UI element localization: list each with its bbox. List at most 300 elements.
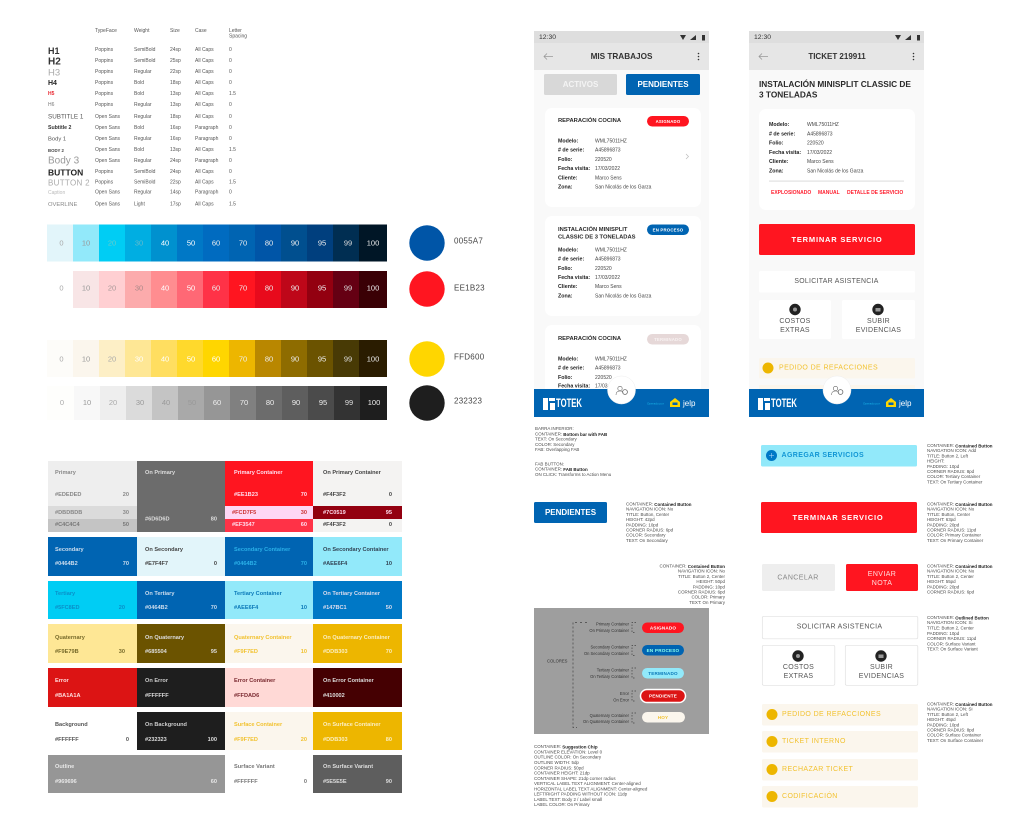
panel: tonal palette blue: 95 (318, 238, 326, 248)
panel: phone screen ticket (749, 31, 924, 417)
type specifications: 13sp (170, 147, 181, 153)
panel: tonal palette blue: 90 (291, 238, 299, 248)
text block: cancelar and enviar spec: TITLE: Button 2, Center (927, 574, 974, 579)
row: secondary: 70 (123, 561, 129, 567)
row: background and surface: 0 (126, 737, 129, 743)
type specifications: All Caps (195, 202, 214, 208)
row: error: On Error (145, 678, 169, 684)
type specifications: Poppins (95, 69, 114, 75)
type specifications: 17sp (170, 202, 181, 208)
component: ticket interno button: TICKET INTERNO (782, 738, 846, 745)
card: instalacion en proceso: San Nicolás de los Garza (595, 294, 652, 300)
text block: suggestion chip spec: CONTAINER ELEVATION: Level 0 (534, 750, 603, 754)
text block: bottom bar and fab notes: CONTAINER: Bottom bar with FAB (535, 431, 607, 436)
component: ticket interno button (762, 731, 918, 752)
panel: tonal palette grey (47, 386, 387, 420)
text block: agregar servicios spec: NAVIGATION ICON: Add (927, 448, 977, 453)
ticket details card: 220520 (807, 140, 824, 146)
panel: tonal palette red: 10 (82, 284, 90, 292)
text block: surface container button spec: NAVIGATION ICON: Si (927, 707, 972, 712)
row: quaternary: Quaternary Container (234, 635, 292, 641)
text block: cancelar and enviar spec: CONTAINER: Contained Button (927, 564, 993, 568)
type specifications: 0 (229, 80, 232, 86)
row: background and surface: On Background (145, 722, 188, 728)
button: costos extras (759, 300, 831, 339)
row: background and surface: Background (55, 722, 88, 728)
table header: Weight (134, 28, 150, 34)
panel: suggestion chips diagram: On Error (613, 698, 630, 702)
component: subir evidencias outlined button: EVIDENCIAS (859, 673, 904, 680)
panel: tonal palette red: 40 (161, 284, 169, 292)
text block: cancelar and enviar spec (927, 564, 993, 594)
ticket title: INSTALACIÓN MINISPLIT CLASSIC DE (759, 78, 911, 89)
panel: tonal palette grey: 30 (136, 398, 144, 407)
panel: tonal palette red: 80 (265, 284, 273, 292)
text block: cancelar and enviar spec: NAVIGATION ICON: No (927, 569, 975, 574)
row: error: #BA1A1A (55, 693, 80, 699)
type specifications: Paragraph (195, 190, 219, 196)
row: quaternary: 70 (386, 649, 392, 655)
row: error: #410002 (323, 693, 345, 699)
button: pedido de refacciones (759, 358, 915, 378)
type specifications: All Caps (195, 114, 214, 120)
text block: surface container button spec: PADDING: 10pd (927, 722, 960, 727)
card: reparacion cocina terminado: WML75011HZ (595, 356, 627, 362)
component: cancelar button: CANCELAR (777, 574, 819, 582)
type specifications: All Caps (195, 91, 214, 97)
type specifications: SemiBold (134, 58, 156, 64)
type specifications: Regular (134, 158, 152, 164)
type specifications: 0 (229, 190, 232, 196)
row: primary: #FCD7F5 (232, 510, 256, 516)
row: tertiary: #5FC8ED (55, 605, 80, 611)
row: primary: Primary Container (234, 470, 283, 476)
card: reparacion cocina terminado: # de serie: (558, 366, 584, 372)
panel: tonal palette grey: 95 (319, 398, 327, 407)
row: tertiary: 70 (211, 605, 217, 611)
component: terminar servicio button: TERMINAR SERVICIO (793, 513, 883, 522)
type specifications: Regular (134, 69, 152, 75)
bottom bar (749, 389, 924, 417)
component: codificacion button (762, 786, 918, 808)
type specifications: Poppins (95, 180, 114, 186)
text block: pendientes button spec: CONTAINER: Contained Button (626, 502, 692, 506)
card: instalacion en proceso: Fecha visita: (558, 275, 590, 281)
text block: agregar servicios spec: TITLE: Button 2, Left (927, 453, 969, 458)
panel: suggestion chips diagram: Quaternary Container (590, 713, 630, 718)
text block: surface container button spec: TEXT: On Surface Container (927, 738, 984, 743)
row: primary: #EE1B23 (234, 492, 258, 498)
text block: suggestion chip spec: VERTICAL LABEL TEXT ALIGNMENT: Center-aligned (534, 781, 641, 786)
text block: terminar servicio spec: HEIGHT: 63pd (927, 517, 956, 522)
panel: typography table (48, 28, 247, 208)
ticket details card: EXPLOSIONADO (771, 190, 811, 196)
brand colour swatches (409, 225, 485, 421)
text block: primary contained button spec: CORNER RADIUS: 6pd (678, 590, 726, 594)
row: outline and surface variant: 90 (386, 779, 392, 785)
button: subir evidencias (842, 300, 915, 339)
row: quaternary: 30 (119, 649, 125, 655)
text block: suggestion chip spec: LEFT/RIGHT PADDING WITHOUT ICON: 11dp (534, 792, 628, 796)
type specifications: 1.5 (229, 147, 236, 153)
component: terminar servicio button (761, 502, 917, 533)
panel: tonal palette yellow: 10 (82, 354, 90, 364)
type specifications: Open Sans (95, 147, 121, 153)
ticket title: 3 TONELADAS (759, 90, 818, 100)
type style names: Body 1 (48, 136, 66, 142)
ticket details card: San Nicolás de los Garza (807, 168, 864, 174)
card: reparacion cocina asignado: # de serie: (558, 148, 584, 154)
table header: Spacing (229, 34, 247, 40)
type specifications: 0 (229, 69, 232, 75)
panel: tonal palette yellow: 70 (239, 354, 247, 364)
row: secondary: Secondary (55, 547, 84, 553)
component: agregar servicios button: AGREGAR SERVICIOS (782, 452, 864, 459)
panel: suggestion chips diagram: Tertiary Container (597, 668, 630, 672)
text block: surface container button spec: COLOR: Surface Container (927, 733, 982, 738)
chip: terminado: TERMINADO (648, 671, 678, 676)
brand colour swatches: 0055A7 (454, 236, 483, 246)
panel: tonal palette yellow: 20 (108, 354, 116, 364)
text block: terminar servicio spec: COLOR: Primary Container (927, 533, 982, 538)
text block: terminar servicio spec: CONTAINER: Contained Button (927, 502, 993, 506)
panel: tonal palette yellow: 99 (344, 354, 352, 364)
type specifications: 1.5 (229, 202, 236, 208)
panel: tonal palette grey: 40 (162, 398, 170, 407)
type specifications: All Caps (195, 47, 214, 53)
text block: suggestion chip spec: LABEL TEXT: Body 2 / Label small (534, 797, 602, 802)
row: quaternary (48, 624, 402, 663)
row: secondary: #0464B2 (234, 561, 257, 567)
text block: primary contained button spec: CONTAINER: Contained Button (660, 564, 725, 568)
panel: tonal palette grey: 70 (240, 398, 248, 407)
text block: outlined button spec: COLOR: Surface Variant (927, 641, 976, 646)
type specifications: 16sp (170, 136, 181, 142)
panel: tonal palette red: 100 (367, 284, 379, 292)
text block: agregar servicios spec: COLOR: Tertiary Container (927, 474, 981, 479)
type specifications: Paragraph (195, 136, 219, 142)
text block: suggestion chip spec: CONTAINER HEIGHT: 21dp (534, 770, 590, 776)
panel: tonal palette blue: 30 (135, 238, 143, 248)
type specifications: Poppins (95, 58, 114, 64)
row: quaternary: 10 (301, 649, 307, 655)
ticket details card: Zona: (769, 168, 784, 174)
component: pedido de refacciones button (762, 704, 918, 726)
type specifications: 0 (229, 114, 232, 120)
row: primary: #C4C4C4 (55, 522, 80, 528)
type specifications: 16sp (170, 125, 181, 131)
row: primary: 50 (123, 522, 129, 528)
row: quaternary: On Quaternary Container (323, 635, 391, 641)
row: primary: 95 (386, 510, 392, 516)
text block: outlined button spec: PADDING: 10pd (927, 631, 960, 636)
row: tertiary: #0464B2 (145, 605, 168, 611)
panel: tonal palette grey: 10 (83, 398, 91, 407)
panel: tonal palette red: 50 (187, 284, 195, 292)
text block: primary contained button spec: NAVIGATION ICON: No (678, 569, 726, 574)
component: rechazar ticket button (762, 759, 918, 780)
tab: pendientes: PENDIENTES (637, 80, 689, 89)
chip: en proceso (642, 645, 684, 656)
app bar (534, 43, 709, 70)
panel: tonal palette yellow: 40 (161, 354, 169, 364)
ticket details card: Fecha visita: (769, 150, 801, 156)
row: error (48, 668, 402, 707)
row: primary: #F4F3F2 (323, 492, 346, 498)
text block: agregar servicios spec: CONTAINER: Contained Button (927, 443, 993, 448)
row: background and surface: #232323 (145, 737, 167, 743)
type specifications: 0 (229, 58, 232, 64)
row: error: #FFDAD6 (234, 693, 259, 699)
text block: suggestion chip spec: LABEL COLOR: On Primary (534, 802, 590, 807)
type style names: BUTTON 2 (48, 178, 90, 188)
type specifications: 13sp (170, 91, 181, 97)
table header: Case (195, 28, 207, 34)
type specifications: All Caps (195, 58, 214, 64)
row: primary: 60 (301, 522, 307, 528)
button: solicitar asistencia (759, 271, 915, 292)
text block: suggestion chip spec: CONTAINER: Suggestion Chip (534, 744, 598, 749)
ticket details card: Folio: (769, 140, 784, 146)
ticket details card (759, 109, 915, 210)
card: reparacion cocina asignado: Marco Sens (595, 175, 622, 181)
type specifications: 24sp (170, 158, 181, 164)
card: reparacion cocina asignado: Folio: (558, 157, 573, 163)
type specifications: SemiBold (134, 180, 156, 186)
row: quaternary: Quaternary (55, 635, 86, 641)
panel: tonal palette red: 90 (291, 284, 299, 292)
component: agregar servicios button (761, 445, 917, 466)
status bar (534, 31, 709, 43)
text block: agregar servicios spec: HEIGHT: (927, 459, 945, 464)
row: background and surface: 80 (386, 737, 392, 743)
chip: asignado: ASIGNADO (650, 625, 676, 630)
table header: TypeFace (95, 28, 117, 34)
text block: terminar servicio spec: NAVIGATION ICON: No (927, 507, 975, 512)
panel: colour roles grid (48, 461, 402, 793)
component: pedido de refacciones button: PEDIDO DE REFACCIONES (782, 711, 881, 718)
type specifications (95, 47, 236, 208)
type specifications: 0 (229, 136, 232, 142)
type specifications: Open Sans (95, 136, 121, 142)
panel: tonal palette blue: 100 (367, 238, 379, 248)
app bar: MIS TRABAJOS (591, 52, 653, 61)
type style names: BODY 2 (48, 148, 65, 153)
ticket details card: MANUAL (818, 190, 840, 196)
card: reparacion cocina asignado: San Nicolás de los Garza (595, 185, 652, 191)
text block: bottom bar and fab notes: FAB: Overlapping FAB (535, 447, 579, 452)
panel: tonal palette blue: 99 (344, 238, 352, 248)
chip: hoy (642, 712, 685, 722)
component: cancelar button (762, 564, 835, 591)
row: tertiary: 10 (301, 605, 307, 611)
panel: tonal palette yellow: 80 (265, 354, 273, 364)
type specifications: Regular (134, 136, 152, 142)
row: outline and surface variant (48, 755, 402, 793)
row: tertiary: Tertiary Container (234, 591, 283, 597)
card: instalacion en proceso: WML75011HZ (595, 247, 627, 253)
type specifications: SemiBold (134, 169, 156, 175)
row: primary: Primary (55, 470, 77, 476)
app bar (749, 43, 924, 70)
type specifications: 0 (229, 169, 232, 175)
type specifications: Regular (134, 190, 152, 196)
row: primary: #EDEDED (55, 492, 81, 498)
card: reparacion cocina asignado (545, 108, 701, 207)
ticket details card: # de serie: (769, 131, 795, 137)
row: secondary: On Secondary Container (323, 547, 389, 553)
row: primary: 70 (301, 492, 307, 498)
card: reparacion cocina asignado: Modelo: (558, 138, 579, 144)
text block: pendientes button spec (626, 502, 692, 543)
type style names: BUTTON (48, 168, 83, 178)
type specifications: Poppins (95, 91, 114, 97)
row: outline and surface variant: 60 (211, 779, 217, 785)
card: reparacion cocina asignado: 17/03/2022 (595, 166, 620, 172)
text block: bottom bar and fab notes: COLOR: Secondary (535, 442, 575, 447)
card: instalacion en proceso: Cliente: (558, 284, 578, 290)
tab: activos: ACTIVOS (563, 80, 599, 89)
card: reparacion cocina terminado: A45896873 (595, 366, 621, 372)
chip: hoy: HOY (658, 715, 668, 720)
panel: tonal palette red: 30 (135, 284, 143, 292)
card: instalacion en proceso: CLASSIC DE 3 TONELADAS (558, 234, 636, 240)
type specifications: Poppins (95, 47, 114, 53)
row: primary: 0 (389, 492, 392, 498)
row: outline and surface variant: #969696 (55, 779, 77, 785)
component: solicitar asistencia outlined button (762, 616, 918, 639)
text block: suggestion chip spec (534, 744, 648, 807)
row: background and surface: #DDB303 (323, 737, 348, 743)
card: reparacion cocina terminado: 17/03 (595, 384, 608, 390)
text block: pendientes button spec: COLOR: Secondary (626, 533, 666, 538)
component: pendientes button (534, 502, 607, 523)
text block: agregar servicios spec: CORNER RADIUS: 8pd (927, 469, 975, 474)
button: solicitar asistencia: SOLICITAR ASISTENCIA (794, 278, 879, 285)
text block: surface container button spec: CORNER RADIUS: 8pd (927, 728, 975, 732)
row: secondary (48, 537, 402, 576)
panel: suggestion chips diagram: On Secondary Container (584, 651, 630, 656)
panel: suggestion chips diagram: On Primary Container (589, 628, 630, 633)
text block: outlined button spec: TITLE: Button 2, Center (927, 626, 974, 630)
button: subir evidencias: SUBIR (867, 318, 890, 325)
ticket details card: Marco Sens (807, 159, 834, 165)
ticket details card: 17/03/2022 (807, 150, 832, 156)
panel: tonal palette blue: 60 (212, 238, 220, 248)
row: background and surface: 20 (301, 737, 307, 743)
row: primary: On Primary (145, 470, 176, 476)
bottom bar: Operado por (863, 402, 880, 406)
ticket details card: Cliente: (769, 159, 789, 165)
panel: tonal palette blue: 70 (239, 238, 247, 248)
card: reparacion cocina terminado: TERMINADO (654, 337, 682, 342)
row: tertiary: 20 (119, 605, 125, 611)
row: primary: 20 (123, 492, 129, 498)
type specifications: Open Sans (95, 114, 121, 120)
text block: outlined button spec: CORNER RADIUS: 11pd (927, 636, 977, 641)
panel: tonal palette blue: 20 (108, 238, 116, 248)
button: costos extras: COSTOS (779, 318, 811, 325)
brand colour swatches: 232323 (454, 396, 482, 406)
text block: bottom bar and fab notes (535, 426, 612, 477)
text block: outlined button spec (927, 615, 989, 652)
panel: tonal palette grey: 90 (292, 398, 300, 407)
type specifications: Poppins (95, 169, 114, 175)
card: instalacion en proceso: A45896873 (595, 257, 621, 263)
row: tertiary: Tertiary (55, 591, 76, 597)
chip: pendiente (640, 690, 686, 702)
type style names: Caption (48, 190, 65, 196)
panel: tonal palette yellow: 50 (187, 354, 195, 364)
type specifications: SemiBold (134, 47, 156, 53)
bottom bar: TOTEK (556, 396, 582, 410)
type specifications: 22sp (170, 180, 181, 186)
row: outline and surface variant: 0 (304, 779, 307, 785)
panel: tonal palette red (47, 271, 387, 308)
panel: tonal palette blue: 0 (59, 238, 64, 248)
card: instalacion en proceso: EN PROCESO (653, 227, 684, 232)
panel: suggestion chips diagram: On Quaternary Container (583, 719, 630, 724)
table header: Size (170, 28, 180, 34)
text block: suggestion chip spec: OUTLINE COLOR: On Secondary (534, 755, 602, 760)
row: primary: On Primary Container (323, 470, 382, 476)
card: reparacion cocina asignado: 220520 (595, 157, 612, 163)
card: instalacion en proceso: Marco Sens (595, 284, 622, 290)
row: quaternary: #F9E79B (55, 649, 79, 655)
card: instalacion en proceso: 17/03/2022 (595, 275, 620, 281)
type specifications: All Caps (195, 80, 214, 86)
type specifications: 0 (229, 125, 232, 131)
row: quaternary: #DDB303 (323, 649, 348, 655)
bottom bar: TOTEK (771, 396, 797, 410)
card: instalacion en proceso: INSTALACIÓN MINISPLIT (558, 225, 628, 233)
row: error: Error (55, 678, 70, 684)
text block: pendientes button spec: HEIGHT: 42pd (626, 517, 655, 522)
row: primary: #F4F3F2 (323, 522, 346, 528)
row: primary: 30 (301, 510, 307, 516)
ticket details card: WML75011HZ (807, 122, 839, 128)
panel: tonal palette grey: 100 (368, 398, 380, 407)
row: primary: #DBDBDB (55, 510, 82, 516)
text block: bottom bar and fab notes: BARRA INFERIOR: (535, 426, 574, 431)
card: reparacion cocina asignado: Fecha visita: (558, 166, 590, 172)
text block: terminar servicio spec (927, 502, 993, 543)
row: outline and surface variant: #5E5E5E (323, 779, 347, 785)
type specifications: 0 (229, 158, 232, 164)
type specifications: 18sp (170, 114, 181, 120)
panel: suggestion chips diagram: Error (620, 691, 630, 696)
type style names: Subtitle 2 (48, 125, 71, 131)
text block: pendientes button spec: NAVIGATION ICON: No (626, 507, 674, 512)
panel: tonal palette red: 0 (59, 284, 64, 292)
type specifications: Bold (134, 91, 144, 97)
ticket details card: DETALLE DE SERVICIO (847, 190, 903, 196)
type style names: SUBTITLE 1 (48, 114, 84, 120)
table header: Letter (229, 28, 242, 34)
card: reparacion cocina terminado: 220520 (595, 375, 612, 381)
button: terminar servicio (759, 224, 915, 255)
card: reparacion cocina terminado: Modelo: (558, 356, 579, 362)
row: background and surface: #FFFFFF (55, 737, 79, 743)
panel: suggestion chips diagram: Secondary Container (591, 644, 630, 650)
text block: outlined button spec: TEXT: On Surface Variant (927, 646, 978, 652)
row: tertiary: On Tertiary (145, 591, 175, 597)
button: subir evidencias: EVIDENCIAS (856, 327, 901, 334)
card: reparacion cocina terminado: REPARACIÓN COCINA (558, 334, 622, 342)
type style names: H2 (48, 56, 61, 68)
row: tertiary: On Tertiary Container (323, 591, 381, 597)
component: pendientes button: PENDIENTES (545, 508, 597, 517)
